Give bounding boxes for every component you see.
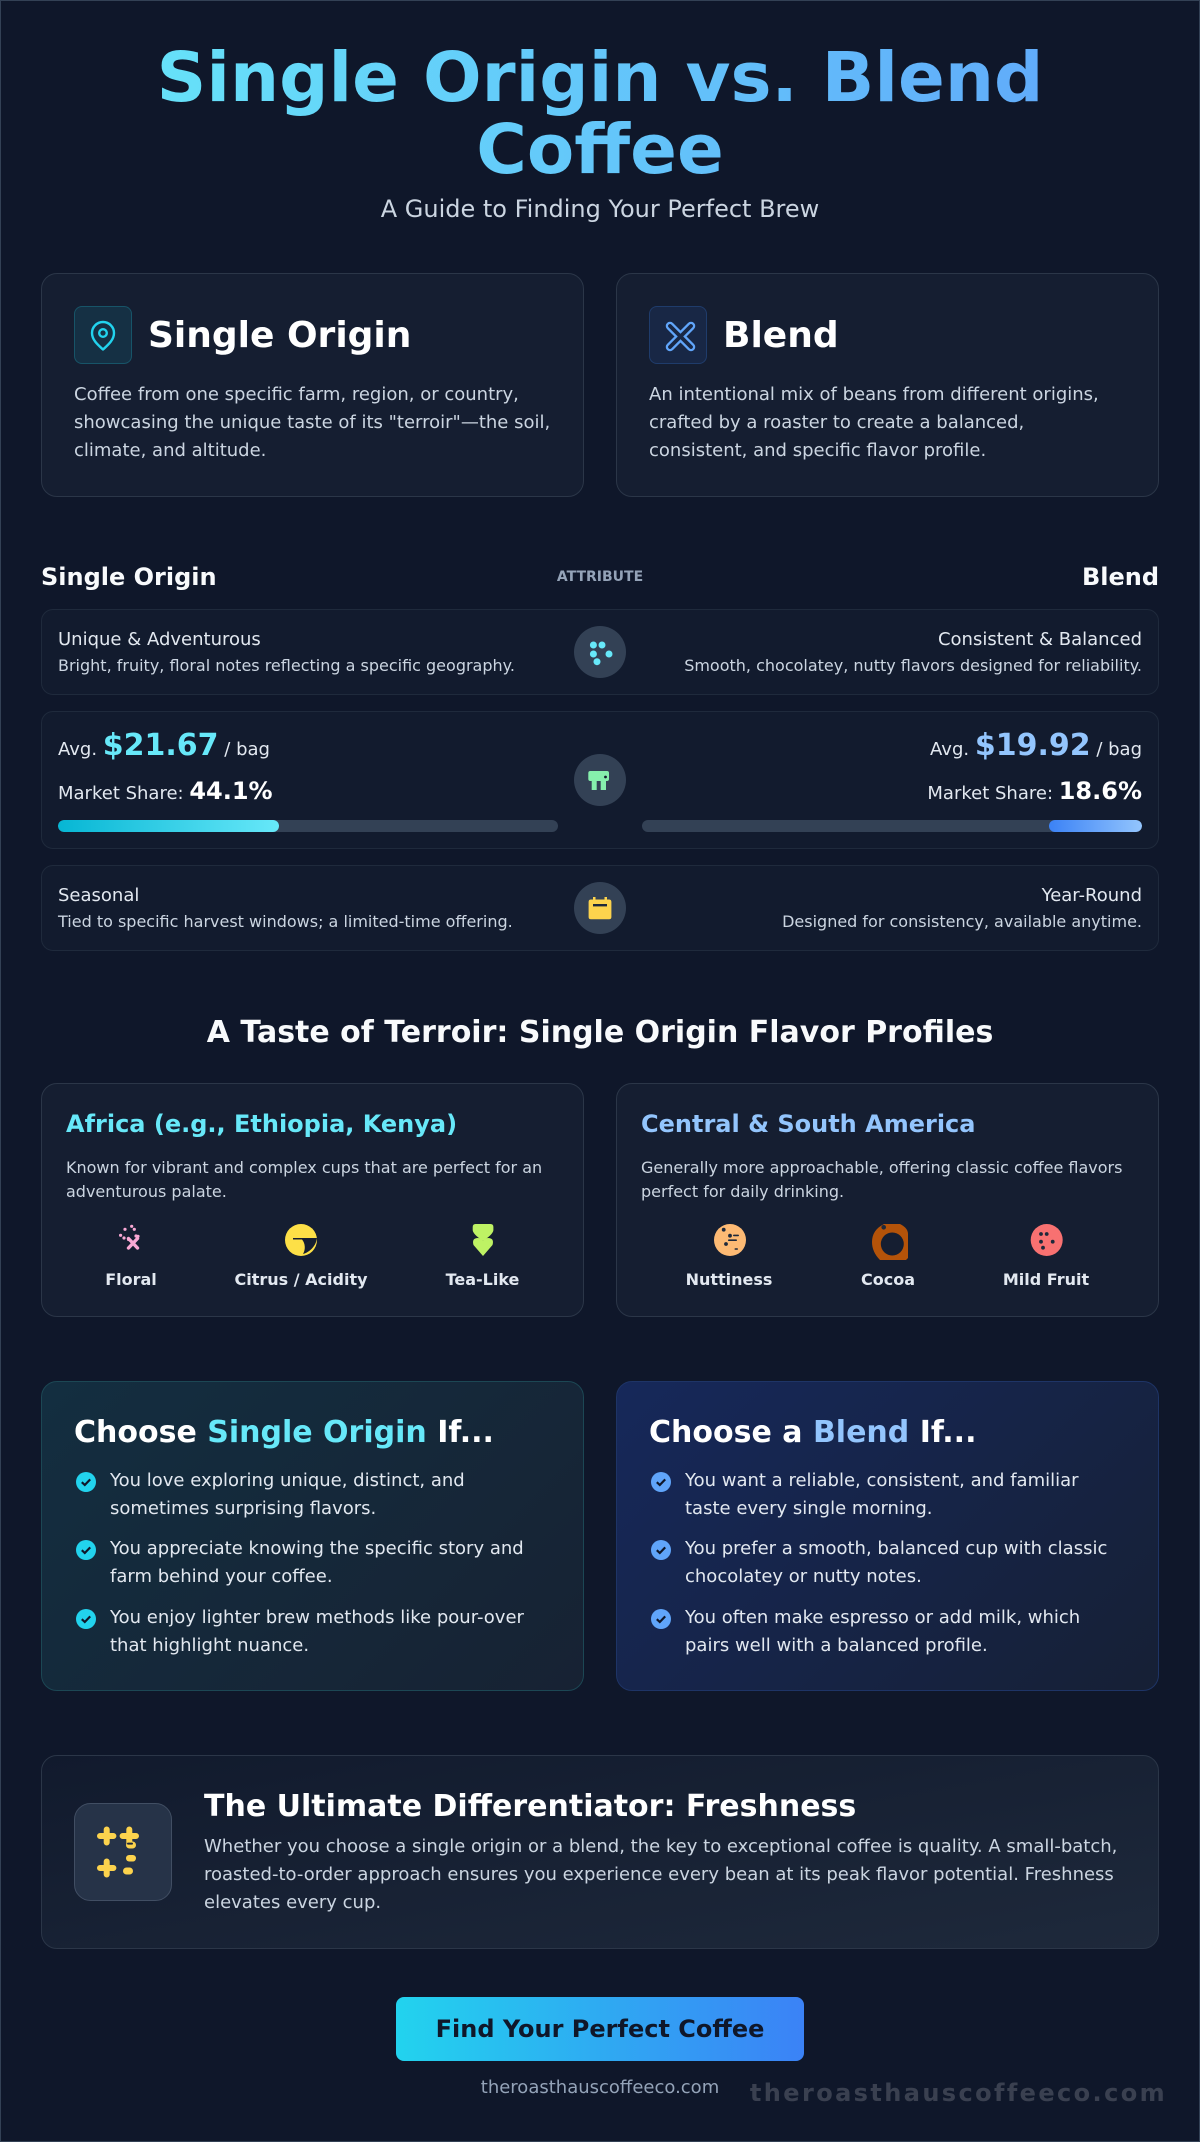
text: africa description <box>66 1158 542 1201</box>
title <box>41 42 1159 186</box>
text: blend definition: crafted by a roaster to create a balanced, <box>649 412 1024 433</box>
text: single origin availability: Seasonal <box>58 885 139 906</box>
text: blend availability: Designed for consistency, available anytime. <box>782 912 1142 931</box>
item: You love exploring unique, distinct, and <box>110 1470 465 1491</box>
list: blend reasons <box>651 1470 1107 1656</box>
panel: blend definition <box>616 273 1159 497</box>
text: single origin definition: climate, and altitude. <box>74 440 266 461</box>
item: You often make espresso or add milk, which <box>685 1607 1080 1628</box>
text: single origin flavor: Unique & Adventurous <box>58 629 261 650</box>
item: farm behind your coffee. <box>110 1566 333 1587</box>
icon: tea leaf <box>472 1224 494 1256</box>
list: single origin reasons <box>76 1470 524 1656</box>
text: blend definition: An intentional mix of beans from different origins, <box>649 384 1099 405</box>
label: citrus: Citrus / Acidity <box>234 1270 368 1289</box>
item <box>76 1538 524 1587</box>
text: americas description: perfect for daily drinking. <box>641 1182 844 1201</box>
icon: calendar <box>574 882 626 934</box>
heading: single origin: Single Origin <box>148 315 411 356</box>
icon: map pin <box>74 306 132 364</box>
item <box>76 1607 524 1656</box>
title: Single Origin vs. Blend <box>157 38 1043 118</box>
item: that highlight nuance. <box>110 1635 309 1656</box>
item <box>651 1470 1079 1519</box>
bar: single origin market share <box>58 820 558 832</box>
row: flavor <box>41 609 1159 695</box>
subtitle: A Guide to Finding Your Perfect Brew <box>381 195 819 223</box>
item: You enjoy lighter brew methods like pour-over <box>110 1607 524 1628</box>
stats: blend price and share <box>927 728 1142 805</box>
heading: blend: Blend <box>723 315 839 356</box>
label: tea-like: Tea-Like <box>446 1270 519 1289</box>
text: single origin availability <box>58 885 513 931</box>
text: single origin flavor <box>58 629 515 675</box>
panel: africa flavors <box>41 1083 584 1317</box>
text: single origin definition: Coffee from one specific farm, region, or country, <box>74 384 519 405</box>
item: chocolatey or nutty notes. <box>685 1566 922 1587</box>
heading: single origin <box>74 306 411 364</box>
heading: choose blend: Choose a Blend If... <box>649 1415 976 1450</box>
stats: single origin price and share: Avg. $21.67 / bag <box>58 728 270 763</box>
panel: choose single origin <box>41 1381 584 1691</box>
item: taste every single morning. <box>685 1498 932 1519</box>
button: call to action: Find Your Perfect Coffee <box>436 2015 764 2043</box>
icon: freshness sparkles <box>74 1803 172 1901</box>
comparison header: single origin: Single Origin <box>41 563 217 591</box>
text: blend definition: consistent, and specific flavor profile. <box>649 440 986 461</box>
panel: single origin definition <box>41 273 584 497</box>
text: blend availability <box>782 885 1142 931</box>
panel: freshness <box>41 1755 1159 1949</box>
icon: flavor dots <box>574 626 626 678</box>
text: freshness description <box>204 1836 1117 1913</box>
heading: africa: Africa (e.g., Ethiopia, Kenya) <box>66 1110 457 1138</box>
text: africa description: Known for vibrant and complex cups that are perfect for an <box>66 1158 542 1177</box>
item <box>76 1470 465 1519</box>
button: call to action <box>396 1997 804 2061</box>
stats: single origin price and share <box>58 728 273 805</box>
label: nuttiness: Nuttiness <box>686 1270 772 1289</box>
stats: blend price and share: Avg. $19.92 / bag <box>930 728 1142 763</box>
text: blend definition <box>649 384 1099 461</box>
text: africa description: adventurous palate. <box>66 1182 227 1201</box>
row: price and market share <box>41 711 1159 849</box>
heading: choose single origin: Choose Single Origin If... <box>74 1415 494 1450</box>
item <box>651 1538 1107 1587</box>
bar: blend market share <box>642 820 1142 832</box>
text: single origin flavor: Bright, fruity, floral notes reflecting a specific geography. <box>58 656 515 675</box>
footer url: theroasthauscoffeeco.com <box>481 2077 719 2098</box>
panel: central and south america flavors <box>616 1083 1159 1317</box>
title: Coffee <box>476 110 724 190</box>
label: floral: Floral <box>105 1270 157 1289</box>
item: sometimes surprising flavors. <box>110 1498 376 1519</box>
item: You prefer a smooth, balanced cup with classic <box>685 1538 1107 1559</box>
label: mild fruit: Mild Fruit <box>1003 1270 1089 1289</box>
icon: cocoa <box>872 1224 908 1260</box>
text: americas description: Generally more approachable, offering classic coffee flavors <box>641 1158 1122 1177</box>
heading: central and south america: Central & South America <box>641 1110 975 1138</box>
panel: choose blend <box>616 1381 1159 1691</box>
heading: freshness: The Ultimate Differentiator: Freshness <box>204 1789 856 1824</box>
text: single origin definition <box>74 384 550 461</box>
comparison header: attribute: ATTRIBUTE <box>557 569 643 585</box>
text: blend availability: Year-Round <box>1042 885 1142 906</box>
stats: blend price and share: Market Share: 18.6% <box>927 777 1142 805</box>
label: cocoa: Cocoa <box>861 1270 915 1289</box>
icon: citrus <box>285 1224 317 1256</box>
icon: cross <box>649 306 707 364</box>
row: availability <box>41 865 1159 951</box>
item: You appreciate knowing the specific story and <box>110 1538 524 1559</box>
heading: blend <box>649 306 839 364</box>
text: blend flavor: Consistent & Balanced <box>938 629 1142 650</box>
text: single origin definition: showcasing the unique taste of its "terroir"—the soil, <box>74 412 550 433</box>
watermark: theroasthauscoffeeco.com <box>750 2079 1167 2107</box>
item: You want a reliable, consistent, and familiar <box>685 1470 1079 1491</box>
icon: floral <box>119 1224 140 1250</box>
text: single origin availability: Tied to specific harvest windows; a limited-time offering. <box>58 912 513 931</box>
item: pairs well with a balanced profile. <box>685 1635 988 1656</box>
comparison header: blend: Blend <box>1082 563 1159 591</box>
text: freshness description: roasted-to-order approach ensures you experience every bean at its peak flavor potential. Freshness <box>204 1864 1114 1885</box>
text: blend flavor: Smooth, chocolatey, nutty flavors designed for reliability. <box>684 656 1142 675</box>
heading: flavor profiles: A Taste of Terroir: Single Origin Flavor Profiles <box>207 1015 993 1050</box>
text: freshness description: Whether you choose a single origin or a blend, the key to exceptional coffee is quality. A small-batch, <box>204 1836 1117 1857</box>
icon: mild fruit <box>1030 1224 1063 1256</box>
text: blend flavor <box>684 629 1142 675</box>
text: freshness description: elevates every cup. <box>204 1892 381 1913</box>
text: americas description <box>641 1158 1122 1201</box>
icon: nuttiness <box>714 1224 746 1256</box>
stats: single origin price and share: Market Share: 44.1% <box>58 777 273 805</box>
icon: piggy bank <box>574 754 626 806</box>
item <box>651 1607 1080 1656</box>
